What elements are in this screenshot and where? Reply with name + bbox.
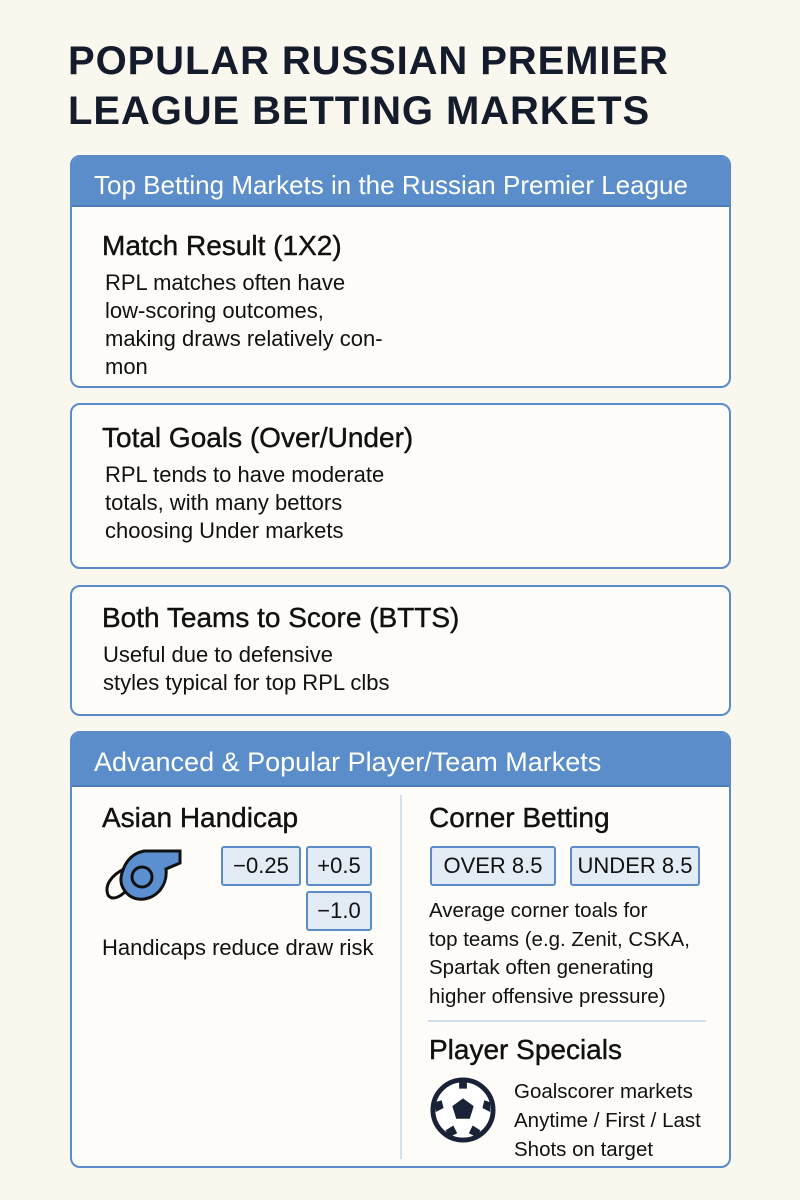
- text: match result: making draws relatively con-: [105, 326, 383, 351]
- heading: total goals: Total Goals (Over/Under): [102, 422, 413, 453]
- panel: top markets: [70, 155, 731, 388]
- text: corners: [429, 899, 690, 1008]
- text: total goals: [105, 462, 384, 543]
- heading: corner betting: Corner Betting: [429, 802, 610, 833]
- text: match result: [105, 270, 383, 379]
- text: match result: RPL matches often have: [105, 270, 345, 295]
- tag: +0.5: +0.5: [317, 853, 361, 878]
- panel: btts: [70, 585, 731, 716]
- heading: match result: Match Result (1X2): [102, 230, 342, 261]
- tag: over 8.5: [430, 846, 556, 886]
- text: player specials: [514, 1080, 701, 1161]
- text: total goals: choosing Under markets: [105, 518, 343, 543]
- tag: -1.0: [306, 891, 372, 931]
- text: total goals: totals, with many bettors: [105, 490, 342, 515]
- heading: btts: Both Teams to Score (BTTS): [102, 602, 459, 633]
- text: match result: mon: [105, 354, 148, 379]
- tag: +0.5: [306, 846, 372, 886]
- text: btts: [103, 642, 390, 695]
- tag: under 8.5: UNDER 8.5: [578, 853, 692, 878]
- heading: player specials: Player Specials: [429, 1034, 622, 1065]
- divider: [400, 795, 402, 1159]
- tag: -1.0: −1.0: [317, 898, 361, 923]
- text: handicap: Handicaps reduce draw risk: [102, 935, 373, 960]
- text: corners: higher offensive pressure): [429, 984, 666, 1008]
- icon: whistle: [105, 850, 182, 901]
- panel: advanced markets: [70, 731, 731, 1168]
- tag: -0.25: [221, 846, 301, 886]
- panel header: Advanced & Popular Player/Team Markets: [94, 747, 601, 777]
- text: btts: styles typical for top RPL clbs: [103, 670, 390, 695]
- tag: over 8.5: OVER 8.5: [443, 853, 543, 878]
- text: corners: Average corner toals for: [429, 899, 647, 922]
- panel: total goals: [70, 403, 731, 569]
- divider: [428, 1020, 706, 1022]
- panel header: [72, 157, 729, 207]
- text: player specials: Shots on target: [514, 1138, 653, 1161]
- text: player specials: Goalscorer markets: [514, 1080, 693, 1103]
- heading: asian handicap: Asian Handicap: [102, 802, 298, 833]
- text: player specials: Anytime / First / Last: [514, 1109, 701, 1132]
- title: [68, 39, 669, 133]
- text: match result: low-scoring outcomes,: [105, 298, 324, 323]
- tag: under 8.5: [570, 846, 700, 886]
- title: POPULAR RUSSIAN PREMIER: [68, 39, 669, 83]
- icon: football: [430, 1078, 496, 1142]
- text: corners: top teams (e.g. Zenit, CSKA,: [429, 928, 690, 950]
- text: total goals: RPL tends to have moderate: [105, 462, 384, 487]
- panel header: Top Betting Markets in the Russian Premier League: [94, 170, 688, 200]
- title: LEAGUE BETTING MARKETS: [68, 89, 650, 133]
- panel header: [72, 733, 729, 787]
- tag: -0.25: −0.25: [233, 853, 289, 878]
- text: btts: Useful due to defensive: [103, 642, 333, 667]
- text: corners: Spartak often generating: [429, 956, 654, 979]
